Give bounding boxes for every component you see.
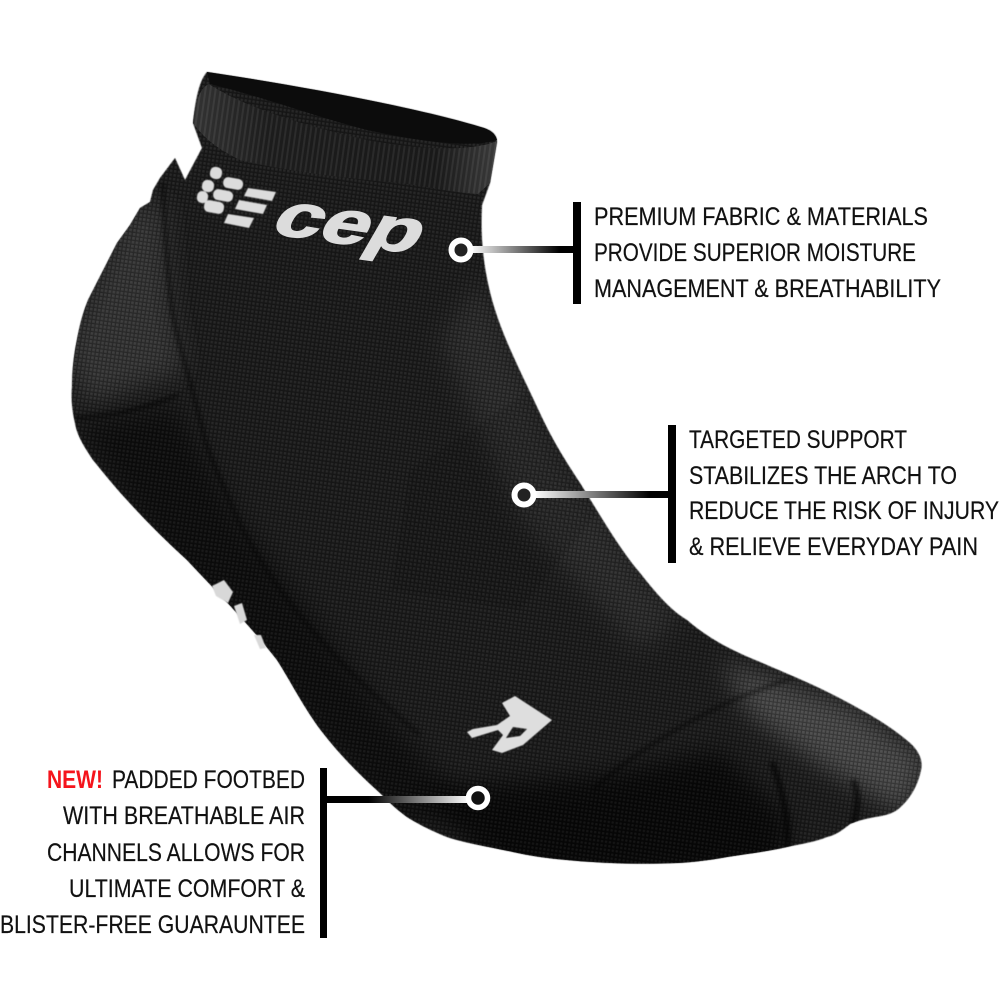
callout text: STABILIZES THE ARCH TO bbox=[689, 462, 957, 490]
callout text: WITH BREATHABLE AIR bbox=[63, 802, 305, 830]
callout text: PADDED FOOTBED bbox=[112, 766, 305, 794]
collar opening bbox=[207, 72, 497, 144]
callout text: CHANNELS ALLOWS FOR bbox=[47, 839, 305, 867]
callout: padded footbed bbox=[0, 766, 488, 939]
heel seam bbox=[163, 183, 225, 490]
sole edge seam bbox=[225, 490, 420, 735]
connector line bbox=[534, 491, 670, 498]
callout text bbox=[0, 766, 305, 939]
callout: premium fabric bbox=[452, 202, 941, 304]
marker dot bbox=[514, 486, 534, 504]
heel crease bbox=[75, 395, 178, 418]
callout: targeted support bbox=[514, 425, 999, 563]
lower heel shadow bbox=[75, 405, 470, 830]
callout text: PREMIUM FABRIC & MATERIALS bbox=[594, 203, 928, 231]
marker dot bbox=[452, 240, 470, 260]
collar ribbing bbox=[193, 84, 497, 194]
callout text: MANAGEMENT & BREATHABILITY bbox=[594, 275, 941, 303]
logo wordmark: cep bbox=[261, 181, 443, 266]
arch highlight bbox=[446, 298, 670, 641]
connector bar bbox=[668, 425, 676, 563]
arch ribbing bbox=[534, 400, 598, 512]
sock collar bbox=[193, 72, 497, 194]
callout text: ULTIMATE COMFORT & bbox=[69, 875, 305, 903]
toe highlight bbox=[720, 660, 930, 815]
cep logo bbox=[196, 166, 443, 266]
connector line bbox=[470, 246, 575, 253]
connector line bbox=[325, 796, 470, 803]
toe seam bbox=[612, 675, 794, 774]
sole shadow bbox=[444, 752, 799, 864]
sock illustration bbox=[60, 60, 960, 880]
callout text: BLISTER-FREE GUARAUNTEE bbox=[0, 911, 305, 939]
callout text: PROVIDE SUPERIOR MOISTURE bbox=[594, 239, 916, 267]
connector bar bbox=[320, 768, 327, 938]
toe ridges bbox=[772, 762, 857, 850]
marker dot bbox=[468, 788, 488, 808]
callout text bbox=[689, 426, 999, 561]
callout text: TARGETED SUPPORT bbox=[689, 426, 907, 454]
connector bar bbox=[573, 202, 581, 304]
callout text bbox=[594, 203, 941, 303]
foot logo bbox=[467, 696, 552, 753]
sole logo marks bbox=[212, 580, 266, 649]
sock body bbox=[72, 72, 922, 864]
logo dots bbox=[196, 166, 276, 228]
sock shading and knit texture bbox=[60, 60, 960, 880]
callout text: NEW! bbox=[47, 766, 103, 794]
heel highlight bbox=[65, 200, 185, 405]
